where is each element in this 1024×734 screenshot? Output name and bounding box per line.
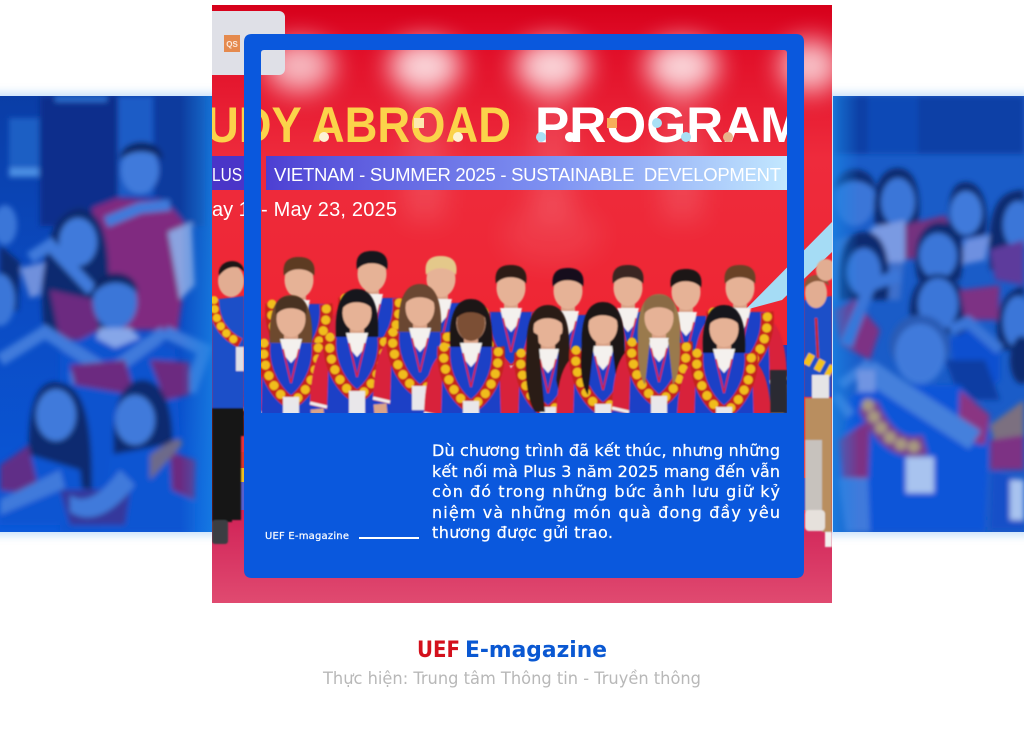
crossed arms: [0, 332, 165, 378]
card caption: paragraph: niệm và những món quà đong đầy yêu: [432, 503, 780, 522]
top-left grey logo plate: [205, 11, 285, 75]
date left fragment: ay 1: [212, 199, 250, 221]
photo: stage backdrop and group: [205, 5, 840, 603]
banner decorative dots: [319, 118, 733, 142]
banner title: study abroad: UDY ABROAD: [206, 97, 511, 153]
stage base with flag colours: [212, 436, 832, 603]
panel: left tinted photo: [0, 96, 212, 532]
QS logo square: [224, 35, 240, 52]
garlands: [0, 445, 40, 495]
back row: [833, 230, 905, 300]
QS logo square: QS: [226, 40, 238, 49]
background glow behind side panels: [0, 92, 1024, 536]
card caption: rule: [359, 537, 419, 539]
centre boy: [60, 332, 185, 532]
footer title: UEF: [417, 638, 460, 663]
back row students: [252, 251, 787, 422]
light blue diagonal stripe: [745, 222, 832, 310]
card caption: paragraph: [432, 441, 780, 542]
card caption: paragraph: thương được gửi trao.: [432, 523, 613, 542]
panel: right tinted photo: [833, 96, 1024, 532]
card caption: source label: UEF E-magazine: [265, 531, 349, 542]
banner ribbon: [212, 156, 244, 190]
date text: - May 23, 2025: [261, 199, 397, 221]
garland: [868, 405, 925, 447]
red shirted boy: [92, 198, 192, 330]
front row students: [242, 283, 787, 420]
footer title: E-magazine: [465, 638, 607, 663]
middle row: [838, 232, 889, 300]
card caption: paragraph: còn đó trong những bức ảnh lưu giữ kỷ: [432, 482, 780, 501]
ribbon text left: LUS: [212, 164, 242, 185]
ribbon text: VIETNAM - SUMMER 2025 - SUSTAINABLE DEVELOPMENT: [274, 164, 781, 185]
red backdrop: [212, 5, 832, 515]
stage lights: [266, 40, 840, 265]
card caption: paragraph: kết nối mà Plus 3 năm 2025 mang đến vẫn: [432, 462, 780, 481]
left girl: [42, 208, 109, 340]
bottom girls: [29, 382, 92, 490]
left edge boy: [0, 245, 20, 315]
blue card frame with photo window and caption area: [244, 34, 804, 578]
footer credit: Thực hiện: Trung tâm Thông tin - Truyền thông: [322, 669, 701, 688]
card caption: paragraph: Dù chương trình đã kết thúc, nhưng những: [432, 441, 780, 460]
id badge: [906, 457, 934, 493]
banner title: program: PROGRAM: [535, 97, 803, 153]
lower blue fill behind the group: [782, 345, 787, 413]
right person: [987, 398, 1024, 442]
outer right person and trousers: [804, 258, 832, 548]
front woman: [890, 312, 952, 360]
outer left person: [212, 261, 244, 544]
shirts and arms: [960, 285, 1000, 320]
